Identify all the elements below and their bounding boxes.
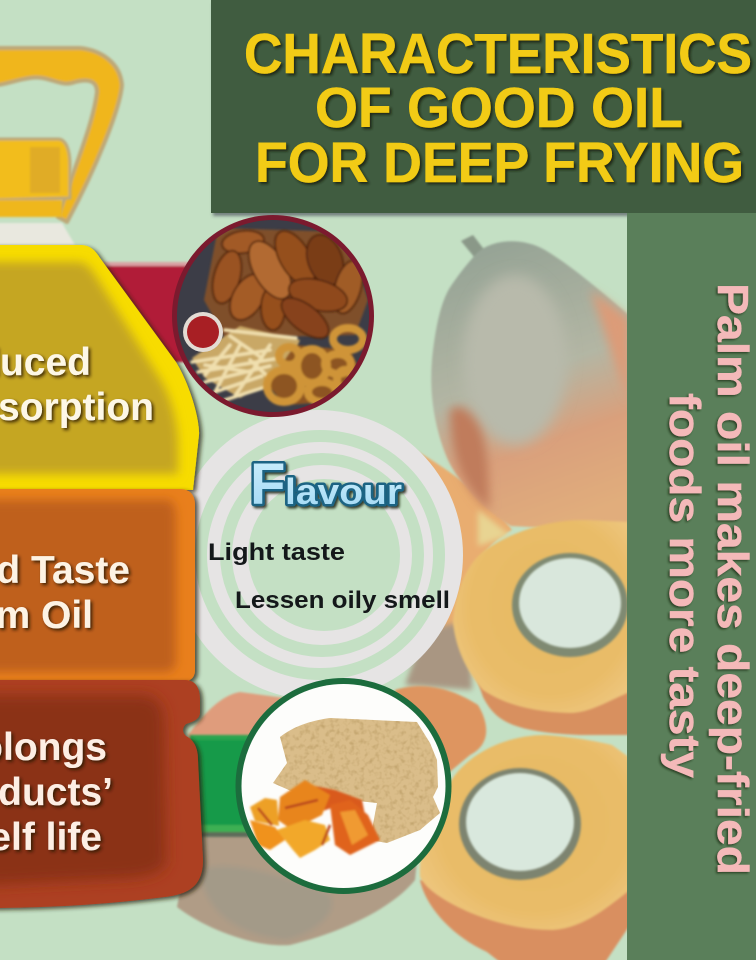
onion rings: [267, 328, 363, 405]
photo: instant noodles and chips: [236, 678, 452, 894]
flavour heading: lavour: [285, 471, 402, 512]
flavour text: light taste: Light taste: [208, 539, 345, 566]
title: [244, 22, 752, 195]
orange section: [0, 489, 195, 682]
photo: fried chicken, fries and onion rings: [170, 215, 380, 420]
bottle neck: [0, 223, 75, 245]
oil bottle: [0, 48, 203, 908]
yellow section: [0, 245, 199, 490]
brown section: [0, 680, 203, 908]
arrow: red connector band: [100, 262, 190, 362]
palm fruit background: [177, 235, 635, 960]
vegetable chips: [250, 780, 380, 858]
bottle cap: [0, 139, 70, 217]
fruit: pale yellow wedge: [478, 510, 510, 546]
label: reduced oil absorption: [0, 341, 154, 429]
ketchup dish: [183, 312, 223, 352]
label: prolongs products shelf life: [0, 726, 113, 859]
title panel: [211, 0, 756, 213]
concentric rings: [173, 410, 463, 700]
bottle handle: [0, 48, 122, 222]
fruit: whole palm fruit: [431, 235, 630, 530]
fruit: orange fruit behind flavour circle: [420, 451, 512, 630]
fruit: grey fruit below noodles: [177, 830, 420, 945]
fruit: upper cut half: [453, 520, 635, 735]
title: OF GOOD OIL: [315, 76, 683, 140]
label: improved taste of palm oil: [0, 549, 130, 637]
fruit: shadowed fruit between halves: [405, 620, 472, 690]
side slogan: foods more tasty: [660, 393, 709, 779]
french fries: [192, 326, 300, 400]
flavour panel: [173, 410, 463, 700]
noodle blocks: [273, 718, 440, 843]
wooden board: [204, 228, 368, 338]
flavour heading: F: [250, 452, 285, 517]
fruit: orange fruit left of lower half: [395, 686, 486, 780]
side slogan: Palm oil makes deep-fried: [708, 283, 756, 875]
side panel: [627, 213, 756, 960]
fruit: lower cut half: [420, 735, 630, 960]
fruit: pink fruit left of noodles: [188, 691, 282, 739]
flavour text: lessen oily smell: Lessen oily smell: [235, 587, 450, 614]
arrow: green connector band: [190, 735, 250, 837]
flavour heading: [250, 452, 402, 517]
side slogan: [660, 283, 756, 875]
chicken wings: [210, 228, 364, 340]
